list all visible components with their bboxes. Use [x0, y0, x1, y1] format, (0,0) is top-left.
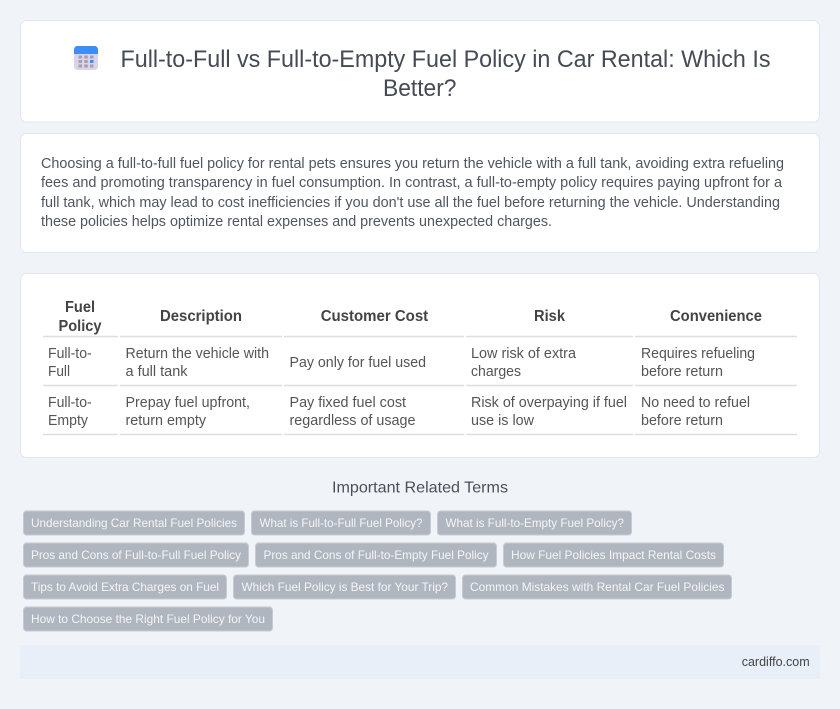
- panel: related term tags: [24, 511, 732, 631]
- table row: Full-to-Full: charges: [471, 364, 521, 380]
- panel: related term tags: Understanding Car Rental Fuel Policies: [31, 516, 237, 530]
- table row: Full-to-Full: Requires refueling: [641, 346, 755, 362]
- panel: related term tags: How Fuel Policies Impact Rental Costs: [511, 548, 716, 562]
- panel: related term tags: How to Choose the Right Fuel Policy for You: [31, 612, 265, 626]
- heading: important related terms: Important Related Terms: [332, 480, 508, 496]
- table header row: Convenience: [670, 308, 762, 325]
- footer: source: [20, 645, 820, 679]
- table row: Full-to-Empty: use is low: [471, 413, 535, 429]
- table header row: [58, 299, 762, 335]
- panel: intro paragraph: these policies helps optimize rental expenses and prevents unexpected charges.: [41, 214, 552, 230]
- table header row: Description: [160, 308, 242, 325]
- table row: Full-to-Full: Full: [48, 364, 70, 380]
- table row: Full-to-Empty: [48, 395, 750, 429]
- table row: Full-to-Full: before return: [641, 364, 723, 380]
- title: [120, 46, 770, 102]
- table row: Full-to-Empty: No need to refuel: [641, 395, 750, 411]
- panel: intro paragraph: Choosing a full-to-full fuel policy for rental pets ensures you return the vehicle with a full tank, avoiding extra refueling: [41, 156, 784, 172]
- table row: Full-to-Full: Return the vehicle with: [126, 346, 269, 362]
- table row: Full-to-Empty: before return: [641, 413, 723, 429]
- panel: comparison table: [20, 274, 820, 458]
- table header row: Customer Cost: [321, 308, 429, 325]
- table row: Full-to-Empty: regardless of usage: [290, 413, 416, 429]
- table row: Full-to-Empty: Empty: [48, 413, 89, 429]
- table row: Full-to-Full: [48, 346, 755, 380]
- panel: related term tags: Which Fuel Policy is Best for Your Trip?: [242, 580, 448, 594]
- table header row: Policy: [58, 318, 102, 335]
- panel: related term tags: Common Mistakes with Rental Car Fuel Policies: [470, 580, 724, 594]
- table row: Full-to-Full: Low risk of extra: [471, 346, 576, 362]
- table row: Full-to-Empty: return empty: [126, 413, 207, 429]
- table header row: Fuel: [65, 299, 95, 316]
- table row: Full-to-Full: a full tank: [126, 364, 188, 380]
- table row: Full-to-Empty: Pay fixed fuel cost: [290, 395, 406, 411]
- footer: source: cardiffo.com: [742, 654, 810, 669]
- panel: related term tags: Pros and Cons of Full-to-Empty Fuel Policy: [264, 548, 488, 562]
- panel: intro paragraph: fees and promoting transparency in fuel consumption. In contrast, a full-to-empty policy requires paying upfront for a: [41, 175, 782, 191]
- panel: intro paragraph: full tank, which may lead to cost inefficiencies if you don't use all the fuel before returning the vehicle. Understanding: [41, 195, 780, 211]
- title: Better?: [383, 75, 456, 102]
- panel: intro paragraph: [20, 134, 820, 252]
- table row: Full-to-Empty: Full-to-: [48, 395, 92, 411]
- panel: related term tags: Pros and Cons of Full-to-Full Fuel Policy: [31, 548, 241, 562]
- panel: title header: [20, 20, 820, 122]
- panel: related term tags: Tips to Avoid Extra Charges on Fuel: [31, 580, 219, 594]
- panel: related term tags: What is Full-to-Empty Fuel Policy?: [446, 516, 624, 530]
- panel: related term tags: What is Full-to-Full Fuel Policy?: [260, 516, 423, 530]
- table row: Full-to-Empty: Risk of overpaying if fuel: [471, 395, 627, 411]
- title: Full-to-Full vs Full-to-Empty Fuel Policy in Car Rental: Which Is: [120, 46, 770, 73]
- table row: Full-to-Full: Pay only for fuel used: [290, 355, 426, 371]
- table header row: Risk: [534, 308, 565, 325]
- table row: Full-to-Empty: Prepay fuel upfront,: [126, 395, 250, 411]
- table row: Full-to-Full: Full-to-: [48, 346, 92, 362]
- icon: calendar: [74, 46, 98, 70]
